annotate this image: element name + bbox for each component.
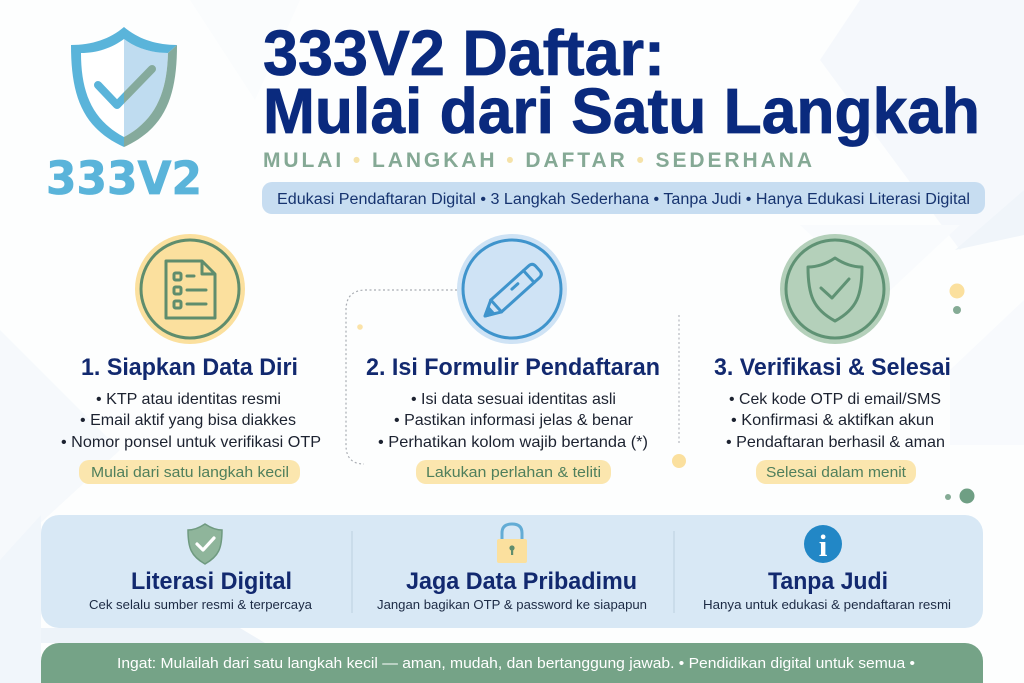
icon: document checklist [135,234,245,344]
tip: literasi digital: Literasi Digital [131,568,292,595]
step 3 note pill [756,460,916,484]
step 2 bullets: • Perhatikan kolom wajib bertanda (*) [378,434,648,451]
dotted connectors and decorative dots [346,284,974,504]
icon: info [804,525,842,563]
footer bar: Ingat: Mulailah dari satu langkah kecil — aman, mudah, dan bertanggung jawab. • Pendidikan digital untuk semua • [117,655,915,672]
logo: shield with check [71,27,177,147]
step 1 heading: 1. Siapkan Data Diri [81,354,298,381]
tip: tanpa judi [703,525,951,612]
title [263,17,980,147]
step 2 bullets [378,391,648,451]
icon: padlock [497,524,527,563]
subtitle tagline: MULAI • LANGKAH • DAFTAR • SEDERHANA [263,149,812,172]
step 1 bullets: • KTP atau identitas resmi [96,391,281,408]
banner pill: Edukasi Pendaftaran Digital • 3 Langkah Sederhana • Tanpa Judi • Hanya Edukasi Literasi Digital [277,191,970,208]
icon: pencil [457,234,567,344]
step 3 bullets: • Konfirmasi & aktifkan akun [731,412,934,429]
logo wordmark: 333V2 [46,152,202,205]
step 3 [714,234,951,484]
icon: shield check [780,234,890,344]
step 1 note pill [79,460,300,484]
step 3 bullets [726,391,945,451]
step 2 note pill: Lakukan perlahan & teliti [426,464,601,481]
step 2 [366,234,660,484]
step 1 bullets: • Email aktif yang bisa diakkes [80,412,296,429]
step 1 bullets: • Nomor ponsel untuk verifikasi OTP [61,434,321,451]
banner pill [262,182,985,214]
step 2 bullets: • Isi data sesuai identitas asli [411,391,616,408]
panel: tips band [41,515,983,628]
title: Mulai dari Satu Langkah [263,75,980,147]
icon: info: i [819,528,828,563]
step 1 note pill: Mulai dari satu langkah kecil [91,464,289,481]
step 3 heading: 3. Verifikasi & Selesai [714,354,951,381]
step 2 heading: 2. Isi Formulir Pendaftaran [366,354,660,381]
step 3 bullets: • Cek kode OTP di email/SMS [729,391,941,408]
footer bar [41,643,983,683]
step 2 note pill [416,460,611,484]
tip: literasi digital: Cek selalu sumber resmi & terpercaya [89,598,312,612]
tip: tanpa judi: Hanya untuk edukasi & pendaftaran resmi [703,598,951,612]
tip: jaga data pribadi: Jangan bagikan OTP & password ke siapapun [377,598,647,612]
step 3 bullets: • Pendaftaran berhasil & aman [726,434,945,451]
step 1 [61,234,321,484]
step 3 note pill: Selesai dalam menit [766,464,907,481]
tip: jaga data pribadi: Jaga Data Pribadimu [406,568,637,595]
tip: literasi digital [89,524,312,612]
step 1 bullets [61,391,321,451]
step 2 bullets: • Pastikan informasi jelas & benar [394,412,634,429]
tip: tanpa judi: Tanpa Judi [768,568,888,595]
tip: jaga data pribadi [377,524,647,612]
icon: green shield [188,524,222,564]
title: 333V2 Daftar: [263,17,665,89]
